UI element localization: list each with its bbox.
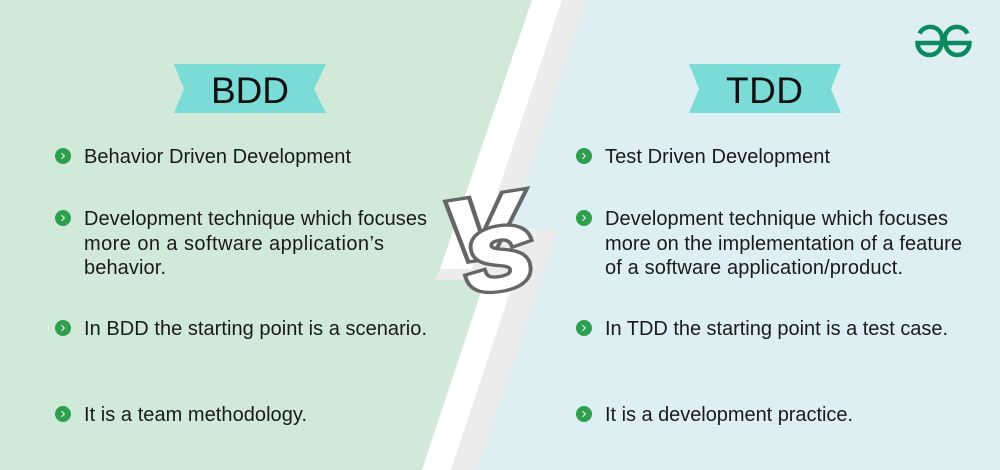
icon: logo [918,27,970,55]
bullet: technique: Development technique which focuses [84,208,427,230]
icon: VS badge: S [459,208,537,310]
bullet: team methodology: It is a team methodology. [84,404,307,426]
icon: VS badge: S [459,208,537,310]
icon: VS badge: V [438,174,534,280]
heading: BDD ribbon: BDD [211,70,289,111]
panel: BDD points [55,146,427,426]
bullet: test driven development: Test Driven Development [605,146,830,168]
heading: BDD ribbon [174,64,326,113]
icon: VS badge [438,174,537,310]
bullet: technique: behavior. [84,257,166,279]
heading: TDD ribbon: TDD [726,70,803,111]
panel: BDD background [0,0,532,470]
panel: TDD points [576,146,962,426]
bullet: behavior driven development: Behavior Driven Development [84,146,351,168]
bullet: technique: more on a software application’s [84,233,384,255]
bullet: technique [55,208,427,279]
bullet: starting point: In BDD the starting point is a scenario. [84,318,427,340]
bullet: technique [576,208,962,279]
bullet: development practice: It is a development practice. [605,404,853,426]
bullet: starting point: In TDD the starting point is a test case. [605,318,948,340]
icon: VS badge: V [438,174,534,280]
bullet: technique: of a software application/product. [605,257,903,279]
bullet: technique: Development technique which focuses [605,208,948,230]
bullet: technique: more on the implementation of a feature [605,233,962,255]
heading: TDD ribbon [689,64,841,113]
